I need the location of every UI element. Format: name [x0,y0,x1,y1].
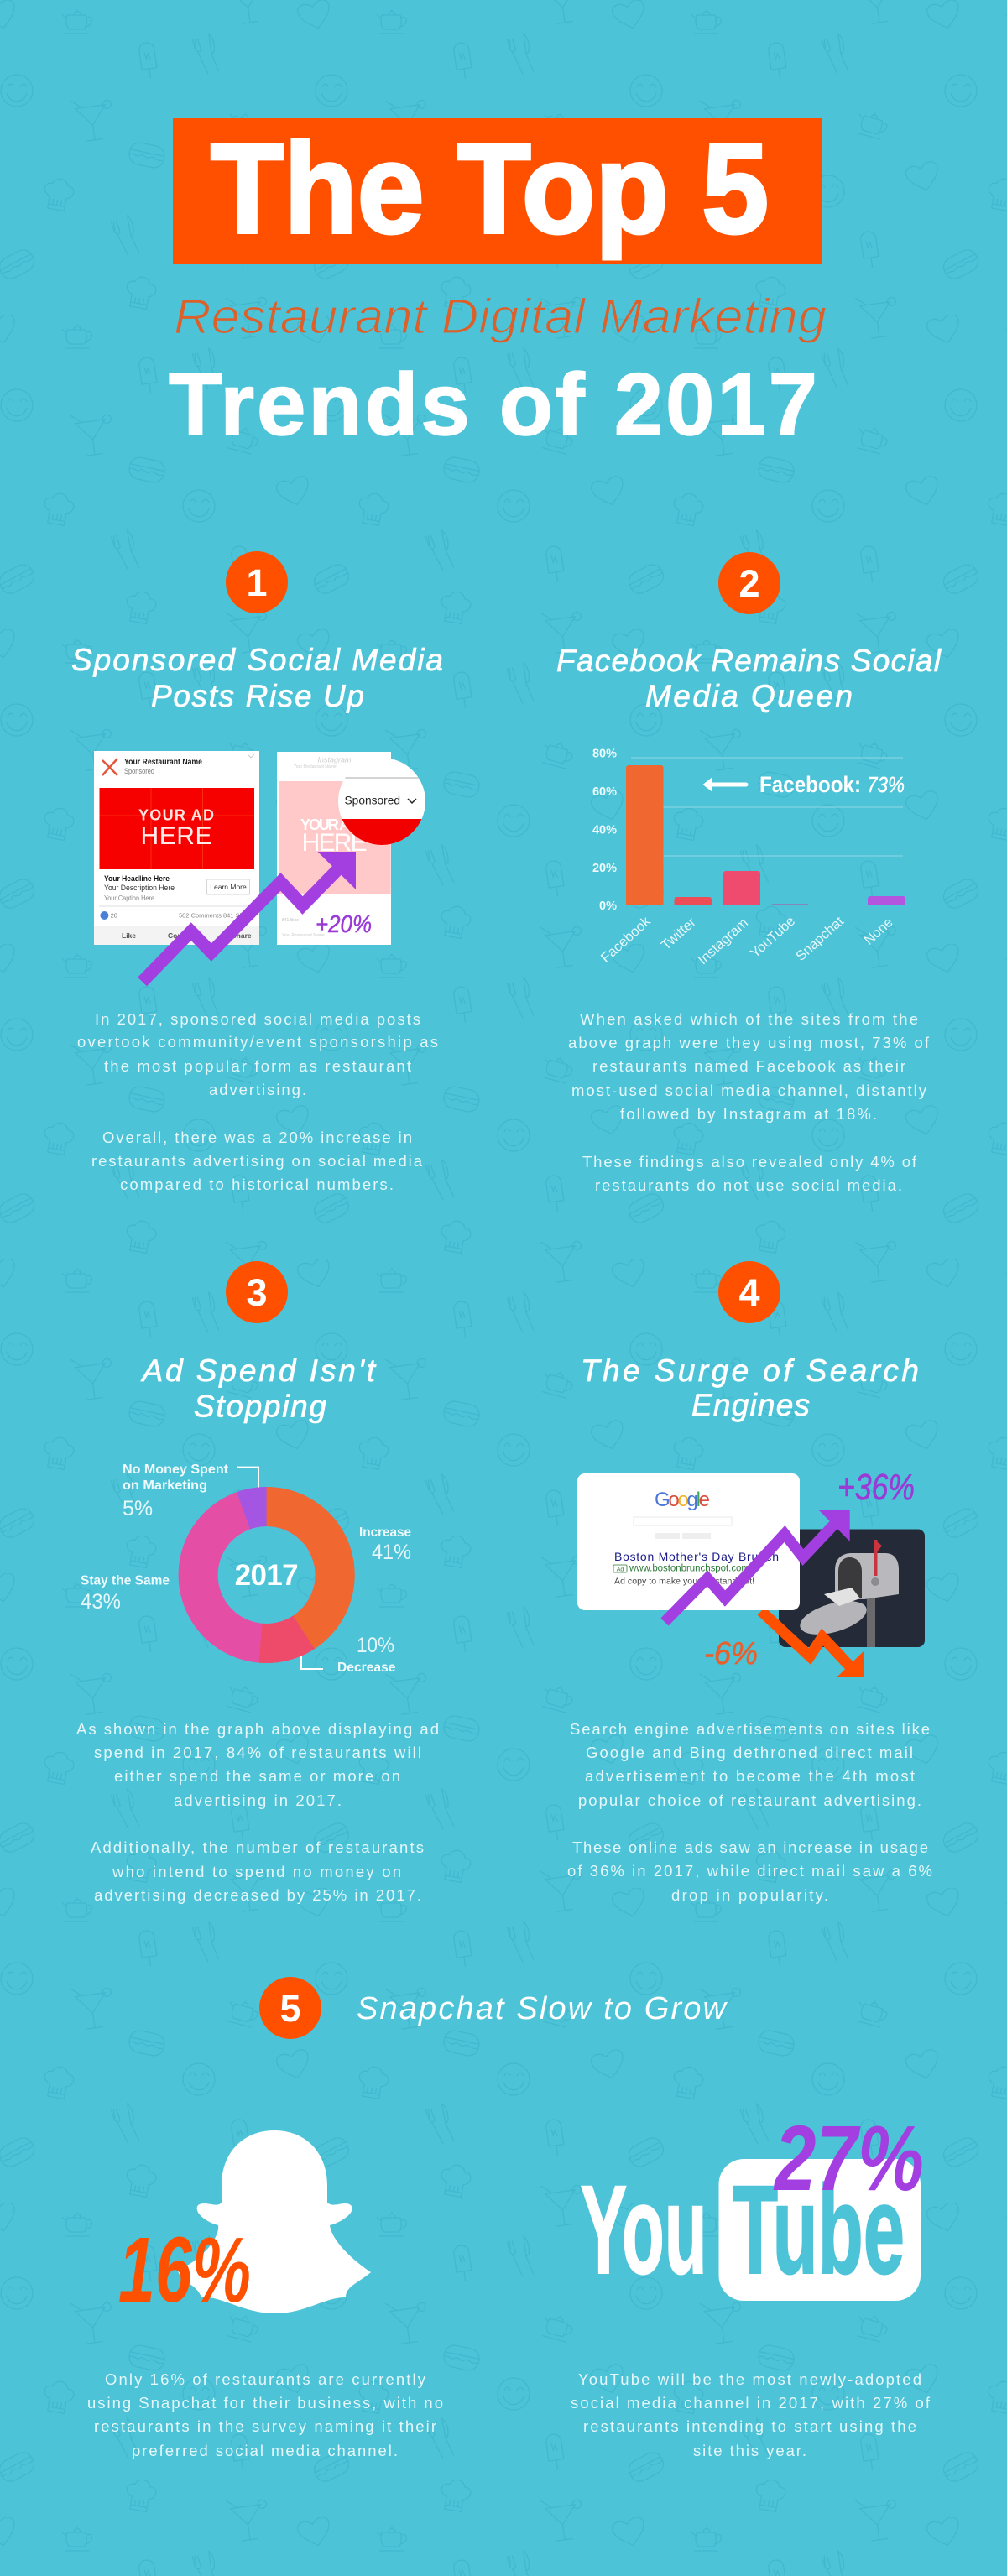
facebook ad mockup: Your Restaurant Name [124,758,202,767]
heading: Ad Spend Isn't [141,1353,377,1388]
body text: snapchat [87,2370,443,2459]
callout: Facebook 73% with arrow: Facebook: [759,772,861,797]
body text: popular choice of restaurant advertising. [578,1791,921,1809]
panel: trend 1 sponsored social posts [71,551,443,1193]
donut labels: Decrease [337,1661,396,1675]
heading: The Surge of Search [581,1353,919,1388]
heading: Engines [691,1388,810,1422]
magnifier: sponsored label: Sponsored [344,794,400,807]
google search mockup: www.bostonbrunchspot.com [629,1564,749,1574]
number badge 3: 3 [246,1271,268,1314]
body text: When asked which of the sites from the [580,1010,918,1028]
number badge 4 [718,1261,780,1323]
body text [76,1720,439,1904]
body text: Search engine advertisements on sites like [570,1720,930,1738]
number badge 1: 1 [246,561,268,604]
donut centre year: 2017 [235,1559,299,1592]
body text: snapchat: preferred social media channel. [132,2442,398,2459]
body text [567,1720,932,1904]
donut labels: Increase [359,1525,411,1540]
27% label: 27% [773,2107,924,2210]
body text: either spend the same or more on [114,1767,400,1785]
-6% label: -6% [704,1636,758,1671]
google search mockup [577,1473,800,1610]
panel: trend 2 Facebook [556,552,942,1194]
body text: In 2017, sponsored social media posts [95,1010,420,1028]
body text [77,1010,438,1193]
bar chart: 20% [592,862,617,875]
body text: Overall, there was a 20% increase in [102,1129,412,1146]
body text: of 36% in 2017, while direct mail saw a 6% [567,1862,932,1880]
callout: Facebook 73% with arrow [703,772,905,797]
heading: Facebook Remains Social [556,644,942,678]
body text: As shown in the graph above displaying ad [76,1720,439,1738]
body text: restaurants named Facebook as their [592,1057,905,1075]
donut labels: 43% [81,1590,121,1614]
purple growth arrow [665,1510,850,1622]
body text: Additionally, the number of restaurants [91,1838,424,1856]
bar chart [592,747,905,967]
body text: compared to historical numbers. [120,1176,394,1193]
donut labels: on Marketing [123,1478,207,1493]
google search mockup: Google [655,1489,710,1511]
heading: Sponsored Social Media [71,643,443,677]
facebook ad mockup: Your Description Here [104,884,175,892]
body text: followed by Instagram at 18%. [620,1105,877,1123]
donut labels: 5% [123,1497,153,1520]
facebook ad mockup: HERE [141,822,211,850]
facebook ad mockup: Learn More [210,883,247,891]
+36% label: +36% [837,1467,915,1508]
donut labels [81,1463,411,1675]
purple growth arrow [143,852,356,982]
facebook ad mockup: Comment [168,931,201,940]
heading: Posts Rise Up [151,679,364,713]
body text [568,1010,930,1194]
body text: advertising decreased by 25% in 2017. [94,1886,421,1904]
body text: who intend to spend no money on [112,1863,401,1880]
instagram ad mockup: Your Restaurant Name [282,933,325,938]
heading: Media Queen [645,679,853,713]
title banner: The Top 5 [211,117,769,260]
subtitle: Restaurant Digital Marketing [174,289,827,344]
facebook ad mockup: 502 Comments 841 Shares [179,911,256,920]
+20% label: +20% [316,911,372,938]
body text: overtook community/event sponsorship as [77,1033,438,1051]
body text: snapchat: Only 16% of restaurants are currently [105,2370,426,2388]
number badge 4: 4 [738,1271,760,1314]
body text: youtube: social media channel in 2017, with 27% of [571,2394,931,2412]
16% label: 16% [118,2219,251,2322]
number badge 5: 5 [279,1987,301,2030]
number badge 5 [259,1977,321,2039]
body text: restaurants do not use social media. [595,1176,902,1194]
heading [141,1353,377,1424]
facebook ad mockup: Your Headline Here [104,874,170,884]
bar chart: Instagram [695,915,751,967]
magnifier: sponsored label [336,758,428,848]
instagram ad mockup: HERE [302,829,368,857]
body text: spend in 2017, 84% of restaurants will [94,1744,421,1761]
bar chart: 0% [599,900,617,913]
number badge 2 [718,552,780,614]
icon: youtube logo: You [581,2159,707,2300]
body text: These findings also revealed only 4% of [582,1153,917,1171]
heading: Snapchat Slow to Grow [357,1991,728,2026]
body text: restaurants advertising on social media [91,1152,423,1170]
icon: snapchat ghost [178,2130,371,2313]
heading [581,1353,919,1422]
body text: drop in popularity. [671,1886,828,1904]
facebook ad mockup: Share [232,931,252,940]
google search mockup: Ad copy to make your ad stand out! [614,1576,754,1586]
body text: above graph were they using most, 73% of [568,1034,930,1051]
body text: youtube [571,2370,931,2459]
bar chart: Twitter [659,915,699,953]
facebook ad mockup: Sponsored [124,767,154,775]
body text: youtube: site this year. [693,2442,806,2459]
body text: the most popular form as restaurant [104,1057,411,1075]
instagram ad mockup: YOUR AD [300,816,359,833]
google search mockup: Boston Mother's Day Brunch [614,1550,779,1563]
body text: advertising. [209,1081,306,1098]
panel: trend 4 search engines [567,1261,932,1904]
heading [71,643,443,713]
instagram ad mockup: Instagram [317,756,352,764]
facebook ad mockup: Your Caption Here [104,894,154,902]
bar chart: None [861,915,896,948]
bar chart: Facebook [598,914,654,966]
donut labels: 10% [357,1634,394,1657]
facebook ad mockup: 20 [111,911,117,920]
bar chart: 40% [592,824,617,837]
donut labels: No Money Spent [123,1463,228,1477]
instagram ad mockup: 841 likes [282,918,299,923]
icon: youtube logo [581,2159,921,2301]
google search mockup: Ad [617,1567,624,1572]
number badge 3 [226,1261,288,1323]
panel: trend 5 Snapchat and YouTube [87,1977,931,2459]
donut labels: Stay the Same [81,1574,170,1588]
number badge 1 [226,551,288,613]
callout: Facebook 73% with arrow: 73% [867,772,905,797]
body text: snapchat: restaurants in the survey naming it their [94,2417,436,2435]
orange downward arrow [761,1611,864,1677]
facebook ad mockup [94,751,259,945]
body text: advertisement to become the 4th most [585,1767,915,1785]
body text: youtube: restaurants intending to start using the [583,2417,916,2435]
bar chart: YouTube [748,914,798,961]
instagram ad mockup [277,752,391,945]
heading: Stopping [194,1390,326,1424]
panel: trend 3 ad spend [76,1261,439,1904]
body text: youtube: YouTube will be the most newly-adopted [578,2370,921,2388]
donut labels: 41% [372,1541,411,1564]
bar chart: 80% [592,747,617,760]
mailbox photo panel [779,1529,925,1647]
bar chart: Snapchat [793,914,847,964]
body text: These online ads saw an increase in usage [572,1838,928,1856]
icon: crossed fork and spoon [102,759,117,775]
instagram ad mockup: Your Restaurant Name [294,764,337,769]
bar chart: 60% [592,785,617,799]
donut chart [198,1507,335,1644]
facebook ad mockup: Like [122,931,136,940]
title line two: Trends of 2017 [169,356,817,454]
body text: advertising in 2017. [174,1791,342,1809]
heading [556,644,942,713]
title block [169,117,827,454]
facebook ad mockup: YOUR AD [138,807,214,824]
body text: snapchat: using Snapchat for their business, with no [87,2394,443,2412]
body text: Google and Bing dethroned direct mail [586,1744,913,1761]
number badge 2: 2 [738,562,760,605]
body text: most-used social media channel, distantly [571,1082,927,1099]
